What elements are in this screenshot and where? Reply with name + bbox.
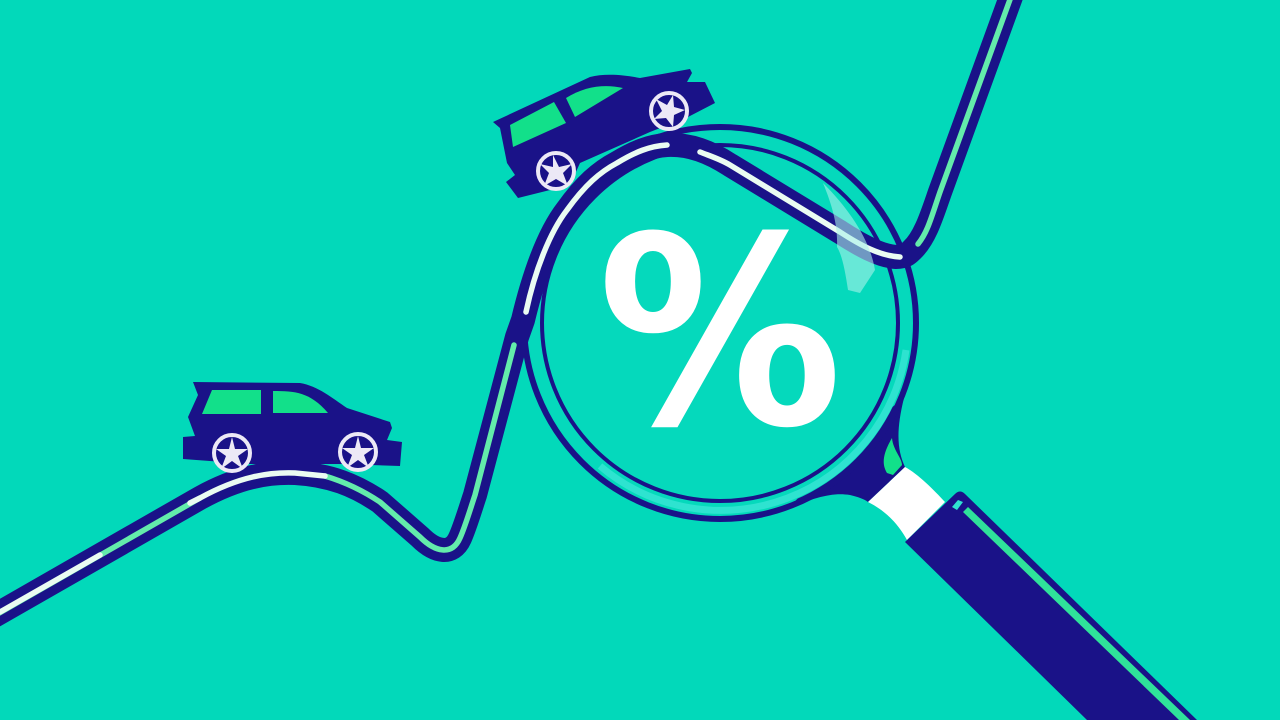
lens glass <box>528 131 912 515</box>
lens light band <box>600 350 906 510</box>
magnifying glass <box>524 127 1197 720</box>
car: lower left <box>183 382 402 471</box>
handle notch <box>952 500 963 510</box>
car: on the peak <box>493 69 715 198</box>
handle neck <box>790 398 905 507</box>
trend line <box>0 0 1012 616</box>
car body <box>183 382 402 466</box>
front wheel <box>651 93 687 129</box>
rear wheel <box>214 435 250 471</box>
percent sign: % <box>597 181 843 485</box>
neck highlight <box>884 438 902 475</box>
white collar <box>868 467 945 540</box>
front window <box>566 86 623 117</box>
rear wheel <box>538 153 574 189</box>
car body <box>493 69 715 198</box>
trend line outline <box>0 0 1012 616</box>
trend line green highlight <box>0 0 1012 616</box>
lens glare <box>823 183 875 293</box>
handle highlight <box>963 507 1190 720</box>
front window <box>273 391 328 413</box>
front wheel <box>340 434 376 470</box>
lens inner rim <box>542 145 898 501</box>
rear window <box>510 102 566 147</box>
trend line white highlight <box>0 145 900 612</box>
handle <box>905 492 1197 720</box>
rear window <box>202 390 261 414</box>
lens outer rim <box>524 127 916 519</box>
